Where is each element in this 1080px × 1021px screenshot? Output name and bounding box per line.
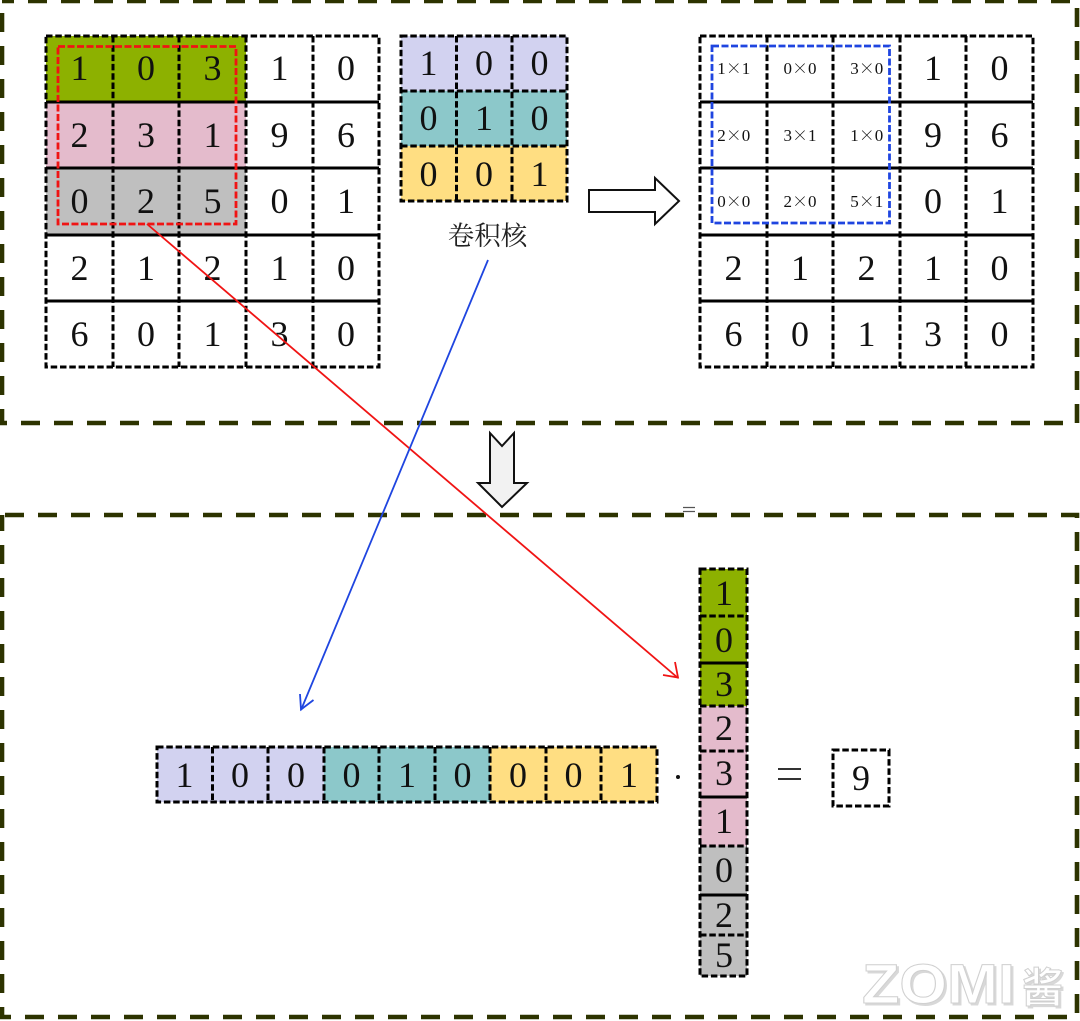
result box: 9	[852, 758, 870, 798]
flattened kernel row vector: 0	[564, 755, 582, 795]
input matrix with coloured 3x3 window: 1	[270, 248, 288, 288]
multiplied matrix: 6	[990, 115, 1008, 155]
watermark: ZOMI	[862, 952, 1015, 1015]
kernel caption: 卷积核	[448, 221, 529, 251]
input matrix with coloured 3x3 window: 2	[70, 115, 88, 155]
input matrix with coloured 3x3 window: 1	[204, 314, 222, 354]
flattened input column vector: 2	[715, 708, 733, 748]
convolution kernel matrix: 0	[475, 154, 493, 194]
flattened kernel row vector: 0	[231, 755, 249, 795]
input matrix with coloured 3x3 window: 6	[337, 115, 355, 155]
multiplied matrix: 0	[990, 48, 1008, 88]
multiplied matrix: 1	[858, 314, 876, 354]
input matrix with coloured 3x3 window: 0	[337, 48, 355, 88]
flattened input column vector: 3	[715, 753, 733, 793]
input matrix with coloured 3x3 window: 0	[137, 314, 155, 354]
flattened input column vector: 5	[715, 935, 733, 975]
multiplied matrix: 0	[791, 314, 809, 354]
multiplied matrix: 1	[791, 248, 809, 288]
convolution kernel matrix	[401, 36, 567, 201]
flattened input column vector: 3	[715, 664, 733, 704]
input matrix with coloured 3x3 window: 2	[204, 248, 222, 288]
input matrix with coloured 3x3 window: 1	[270, 48, 288, 88]
watermark: 酱	[1022, 965, 1063, 1011]
input matrix with coloured 3x3 window: 1	[337, 181, 355, 221]
blue selection window	[712, 46, 890, 223]
multiplied matrix: 6	[724, 314, 742, 354]
convolution kernel matrix: 0	[420, 98, 438, 138]
multiplied matrix: 1×1	[717, 56, 750, 79]
flattened input column vector	[700, 569, 747, 976]
input matrix with coloured 3x3 window: 2	[137, 181, 155, 221]
flattened kernel row vector: 1	[620, 755, 638, 795]
multiplied matrix	[700, 36, 1033, 367]
dot product symbol	[676, 775, 680, 779]
arrow: blue, kernel to row vector	[300, 260, 488, 710]
multiplied matrix: 2	[858, 248, 876, 288]
input matrix with coloured 3x3 window: 0	[337, 248, 355, 288]
multiplied matrix: 1×0	[850, 123, 883, 146]
flattened kernel row vector: 0	[287, 755, 305, 795]
multiplied matrix: 0	[990, 248, 1008, 288]
input matrix with coloured 3x3 window: 0	[137, 48, 155, 88]
flattened kernel row vector: 0	[342, 755, 360, 795]
equals sign	[778, 769, 801, 779]
multiplied matrix: 3	[924, 314, 942, 354]
input matrix with coloured 3x3 window: 2	[70, 248, 88, 288]
flattened kernel row vector: 1	[398, 755, 416, 795]
input matrix with coloured 3x3 window: 3	[270, 314, 288, 354]
flattened input column vector: 0	[715, 620, 733, 660]
arrow: kernel applied to matrix	[589, 178, 679, 224]
input matrix with coloured 3x3 window: 5	[204, 181, 222, 221]
multiplied matrix: 1	[990, 181, 1008, 221]
result box	[833, 750, 889, 806]
input matrix with coloured 3x3 window: 6	[70, 314, 88, 354]
multiplied matrix: 0×0	[717, 189, 750, 212]
convolution kernel matrix: 1	[530, 154, 548, 194]
input matrix with coloured 3x3 window: 1	[70, 48, 88, 88]
multiplied matrix: 2×0	[783, 189, 817, 212]
input matrix with coloured 3x3 window: 9	[270, 115, 288, 155]
flattened kernel row vector	[157, 747, 657, 802]
arrow: red, window to column vector	[147, 224, 678, 678]
arrow: down to dot product	[478, 433, 527, 507]
flattened input column vector: 0	[715, 850, 733, 890]
input matrix with coloured 3x3 window: 0	[270, 181, 288, 221]
flattened input column vector: 2	[715, 895, 733, 935]
multiplied matrix: 0	[990, 314, 1008, 354]
input matrix with coloured 3x3 window: 3	[204, 48, 222, 88]
watermark	[862, 952, 1063, 1015]
input matrix with coloured 3x3 window: 0	[70, 181, 88, 221]
multiplied matrix: 3×0	[850, 56, 883, 79]
input matrix with coloured 3x3 window: 0	[337, 314, 355, 354]
convolution kernel matrix: 0	[420, 154, 438, 194]
small stray equals mark	[683, 508, 695, 512]
multiplied matrix: 2×0	[717, 123, 750, 146]
input matrix with coloured 3x3 window: 1	[204, 115, 222, 155]
input matrix with coloured 3x3 window	[46, 36, 379, 367]
multiplied matrix: 0	[924, 181, 942, 221]
input matrix with coloured 3x3 window: 3	[137, 115, 155, 155]
convolution kernel matrix: 0	[530, 43, 548, 83]
input matrix with coloured 3x3 window: 1	[137, 248, 155, 288]
red selection window	[58, 46, 236, 224]
flattened input column vector: 1	[715, 801, 733, 841]
multiplied matrix: 5×1	[850, 189, 883, 212]
convolution kernel matrix: 1	[420, 43, 438, 83]
multiplied matrix: 3×1	[783, 123, 817, 146]
flattened kernel row vector: 0	[509, 755, 527, 795]
convolution kernel matrix: 0	[475, 43, 493, 83]
multiplied matrix: 2	[724, 248, 742, 288]
panel: bottom dot product	[2, 508, 1077, 1017]
multiplied matrix: 1	[924, 248, 942, 288]
flattened input column vector: 1	[715, 573, 733, 613]
multiplied matrix: 0×0	[783, 56, 817, 79]
convolution kernel matrix: 1	[475, 98, 493, 138]
multiplied matrix: 9	[924, 115, 942, 155]
flattened kernel row vector: 1	[176, 755, 194, 795]
multiplied matrix: 1	[924, 48, 942, 88]
panel: top convolution setup	[2, 1, 1077, 423]
flattened kernel row vector: 0	[454, 755, 472, 795]
convolution kernel matrix: 0	[530, 98, 548, 138]
